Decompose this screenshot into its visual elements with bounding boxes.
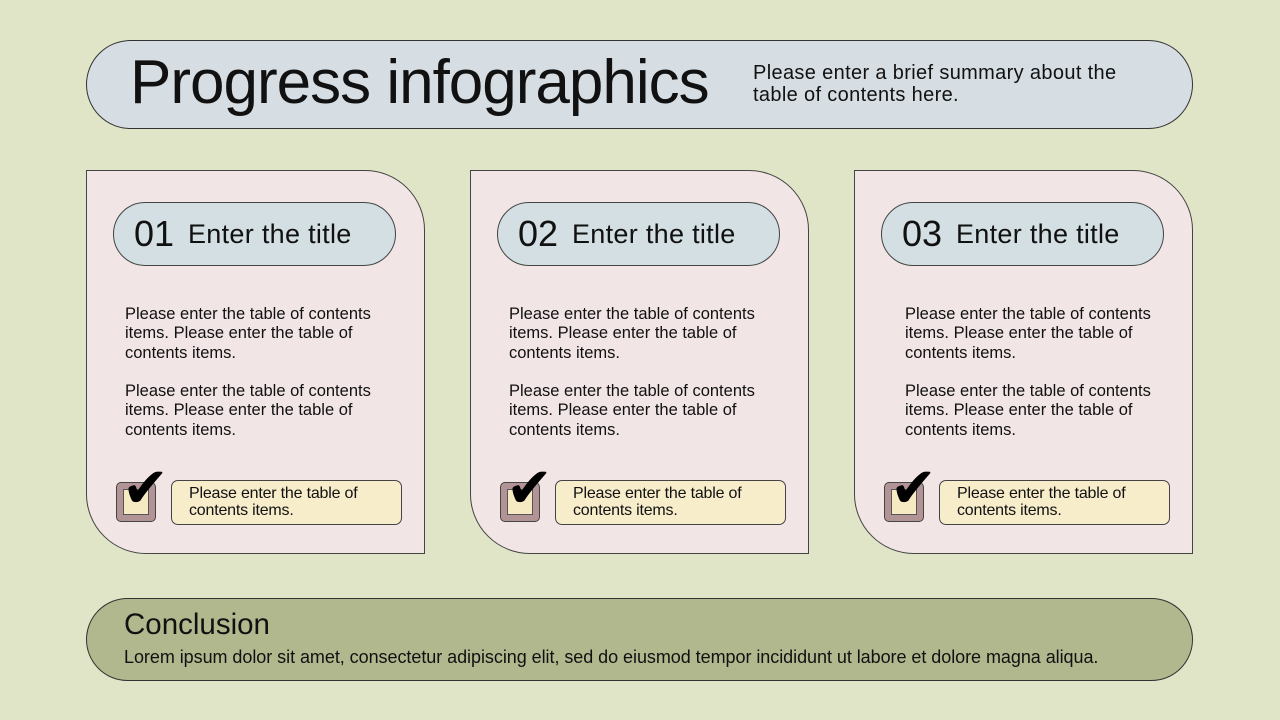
summary text: Please enter a brief summary about the bbox=[753, 62, 1116, 84]
panel: card 02 bbox=[470, 170, 809, 554]
icon: checkbox 01 bbox=[116, 482, 156, 522]
title pill 03: Enter the title bbox=[956, 219, 1120, 249]
body text 01: Please enter the table of contents items. Please enter the table of contents items. bbox=[125, 305, 371, 362]
title pill 03: 03 bbox=[902, 213, 942, 254]
summary text: table of contents here. bbox=[753, 84, 959, 106]
title pill 02: 02 bbox=[518, 213, 558, 254]
title pill 01: Enter the title bbox=[188, 219, 352, 249]
note 02: Please enter the table of bbox=[573, 485, 741, 502]
title pill 02: Enter the title bbox=[572, 219, 736, 249]
title pill 02 bbox=[497, 202, 780, 266]
body text 03: Please enter the table of contents items. Please enter the table of contents items. bbox=[905, 305, 1151, 362]
note 01: contents items. bbox=[189, 502, 294, 519]
panel: card 01 bbox=[86, 170, 425, 554]
note 03 bbox=[939, 480, 1170, 525]
conclusion banner bbox=[86, 598, 1193, 681]
icon: checkbox 03: ✔ bbox=[890, 456, 937, 521]
body text 03 bbox=[905, 305, 1151, 439]
title pill 01: 01 bbox=[134, 213, 174, 254]
note 03: contents items. bbox=[957, 502, 1062, 519]
icon: checkbox 02 bbox=[500, 482, 540, 522]
note 01 bbox=[171, 480, 402, 525]
title: Progress infographics bbox=[130, 48, 709, 117]
conclusion text: Lorem ipsum dolor sit amet, consectetur adipiscing elit, sed do eiusmod tempor incididunt ut labore et dolore magna aliqua. bbox=[124, 647, 1098, 667]
icon: checkbox 03 bbox=[884, 482, 924, 522]
body text 01: Please enter the table of contents items. Please enter the table of contents items. bbox=[125, 382, 371, 439]
body text 01 bbox=[125, 305, 371, 439]
note 01: Please enter the table of bbox=[189, 485, 357, 502]
body text 03: Please enter the table of contents items. Please enter the table of contents items. bbox=[905, 382, 1151, 439]
title pill 03 bbox=[881, 202, 1164, 266]
panel: card 03 bbox=[854, 170, 1193, 554]
summary text bbox=[753, 62, 1116, 106]
body text 02: Please enter the table of contents items. Please enter the table of contents items. bbox=[509, 382, 755, 439]
header banner bbox=[86, 40, 1193, 129]
title pill 01 bbox=[113, 202, 396, 266]
conclusion heading: Conclusion bbox=[124, 608, 270, 641]
body text 02: Please enter the table of contents items. Please enter the table of contents items. bbox=[509, 305, 755, 362]
note 03: Please enter the table of bbox=[957, 485, 1125, 502]
icon: checkbox 02: ✔ bbox=[506, 456, 553, 521]
body text 02 bbox=[509, 305, 755, 439]
icon: checkbox 01: ✔ bbox=[122, 456, 169, 521]
note 02 bbox=[555, 480, 786, 525]
note 02: contents items. bbox=[573, 502, 678, 519]
